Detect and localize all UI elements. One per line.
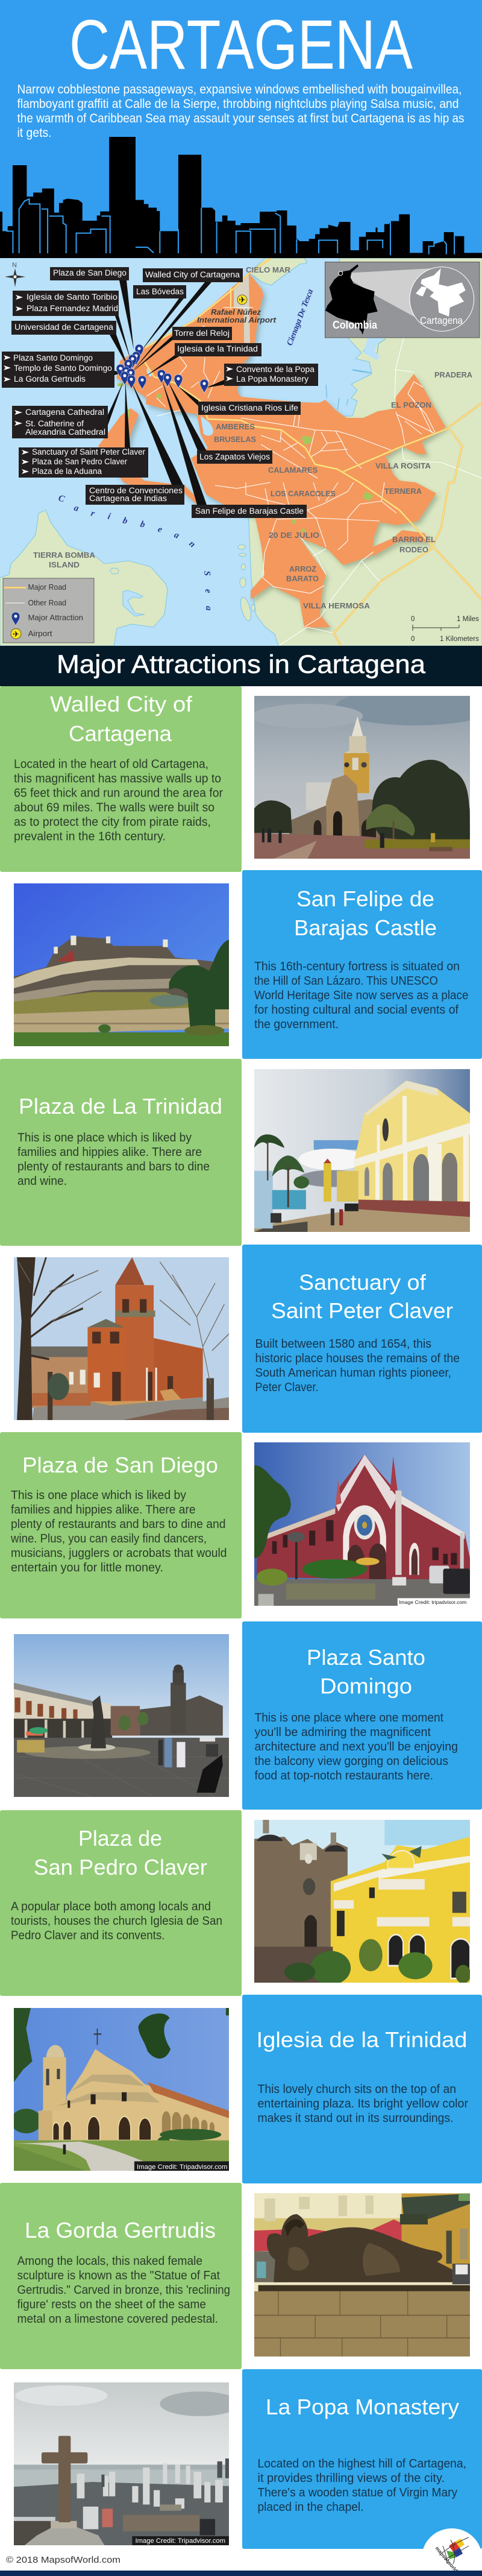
- green parks: [117, 383, 374, 532]
- panel: Plaza de La Trinidad: families and hippies alike. There are: [17, 1146, 202, 1159]
- scale bar: 1 Kilometers: [440, 636, 479, 643]
- area names: RODEO: [399, 546, 428, 554]
- legend: Major Attraction: [28, 613, 83, 622]
- callout text: Iglesia Cristiana Rios Life: [201, 403, 298, 412]
- panel: Plaza de La Trinidad: plenty of restaurants and bars to dine: [17, 1160, 210, 1173]
- panel: Plaza de San Diego: families and hippies alike. There are: [11, 1503, 195, 1517]
- callout text: Convento de la Popa: [236, 365, 315, 374]
- area names: BRUSELAS: [214, 435, 256, 444]
- panel: La Gorda Gertrudis: figure' rests on the sheet of the same: [17, 2298, 206, 2311]
- label: Caribbean Sea: C: [57, 493, 66, 505]
- panel: map of Cartagena: [0, 258, 482, 646]
- panel: San Felipe de Barajas Castle: the government.: [254, 1018, 339, 1031]
- label: Caribbean Sea: i: [107, 511, 112, 522]
- label: Caribbean Sea: n: [187, 539, 197, 549]
- photo: Trinidad church: [254, 1069, 470, 1232]
- panel: La Popa Monastery: There's a wooden statue of Virgin Mary: [258, 2486, 457, 2499]
- callout labels: [2, 267, 318, 518]
- Airport runway: [234, 274, 250, 344]
- area names: AMBERES: [216, 423, 255, 431]
- header panel: [0, 0, 482, 259]
- callout text: [13, 268, 315, 516]
- panel: Iglesia de la Trinidad: Iglesia de la Trinidad: [257, 2027, 468, 2052]
- panel: Plaza Santo Domingo: you'll be admiring the magnificent: [254, 1726, 431, 1739]
- scale bar: 1 Miles: [457, 616, 479, 623]
- callout text: San Felipe de Barajas Castle: [195, 507, 304, 516]
- Cielo Mar land: [249, 258, 307, 285]
- panel: La Gorda Gertrudis: [0, 2183, 242, 2369]
- legend: Airport: [28, 629, 52, 638]
- Tierra Bomba island: [0, 510, 167, 646]
- callout arrows: [4, 295, 233, 474]
- callout text: Las Bóvedas: [136, 287, 184, 296]
- photo: brick church: [14, 1257, 229, 1420]
- panel: Iglesia de la Trinidad: This lovely church sits on the top of an: [258, 2083, 456, 2096]
- callout text: La Popa Monastery: [236, 374, 308, 384]
- panel: Plaza de San Pedro Claver: Pedro Claver and its convents.: [11, 1929, 165, 1942]
- callout text: Walled City of Cartagena: [145, 270, 240, 279]
- panel: Walled City of Cartagena: 65 feet thick and run around the area for: [14, 786, 223, 800]
- intro text: it gets.: [17, 126, 52, 140]
- panel: Plaza Santo Domingo: [242, 1621, 482, 1810]
- scale bar: [411, 616, 479, 643]
- panel: La Gorda Gertrudis: Gertrudis." Carved in bronze, this 'reclining: [17, 2284, 230, 2297]
- panel: Sanctuary of Saint Peter Claver: Sanctuary of: [299, 1270, 427, 1295]
- panel: Plaza de San Diego: [0, 1432, 242, 1618]
- panel: Sanctuary of Saint Peter Claver: historic place houses the remains of the: [255, 1352, 460, 1365]
- panel: Plaza Santo Domingo: food at top-notch restaurants here.: [254, 1769, 433, 1782]
- callout text: Cartagena de Indias: [89, 494, 167, 503]
- panel: Plaza de San Pedro Claver: Plaza de: [78, 1826, 162, 1851]
- label: Caribbean Sea: a: [172, 530, 181, 541]
- area names: CIELO MAR: [246, 266, 290, 274]
- attraction pins: [116, 344, 208, 393]
- area names: BARATO: [286, 575, 319, 583]
- area names: BARRIO EL: [392, 535, 436, 544]
- panel: La Gorda Gertrudis: La Gorda Gertrudis: [25, 2218, 216, 2243]
- airport name: [197, 308, 277, 324]
- area names: ISLAND: [49, 561, 80, 569]
- panel: La Popa Monastery: it provides thrilling views of the city.: [258, 2472, 445, 2485]
- panel: Plaza Santo Domingo: This is one place where one moment: [254, 1711, 443, 1725]
- panel: Sanctuary of Saint Peter Claver: Saint Peter Claver: [271, 1298, 453, 1323]
- label: Caribbean Sea: S: [202, 570, 212, 576]
- callout text: Torre del Reloj: [174, 329, 230, 338]
- small islands: [110, 545, 255, 622]
- label: Caribbean Sea: e: [203, 589, 213, 593]
- panel: San Felipe de Barajas Castle: San Felipe de: [296, 886, 434, 911]
- panel: Plaza de San Pedro Claver: [0, 1810, 242, 1996]
- mainland: [247, 258, 482, 646]
- panel: Plaza de San Diego: entertain you for little money.: [11, 1561, 163, 1574]
- callout text: St. Catherine of: [25, 419, 84, 428]
- panel: Walled City of Cartagena: Located in the heart of old Cartagena,: [14, 757, 208, 771]
- copyright: © 2018 MapsofWorld.com: [6, 2555, 120, 2565]
- panel: Plaza de San Pedro Claver: San Pedro Claver: [34, 1855, 207, 1880]
- scale bar: 0: [411, 616, 415, 623]
- area names: [33, 266, 472, 610]
- callout text: Los Zapatos Viejos: [199, 452, 270, 461]
- area names: LOS CARACOLES: [271, 490, 336, 498]
- label: Caribbean Sea: b: [122, 516, 129, 526]
- callout text: Iglesia de la Trinidad: [177, 344, 258, 353]
- panel: Walled City of Cartagena: about 69 miles. The walls were built so: [14, 801, 214, 814]
- callout text: Plaza de la Aduana: [32, 467, 102, 476]
- panel: Walled City of Cartagena: Walled City of: [50, 692, 193, 716]
- callout text: Plaza Fernandez Madrid: [27, 304, 118, 313]
- area names: 20 DE JULIO: [269, 531, 319, 540]
- inset: Colombia locator: Cartagena: [420, 315, 463, 326]
- callout text: Cartagena Cathedral: [25, 408, 104, 417]
- callout text: Plaza de San Diego: [53, 268, 127, 277]
- photo: bronze sculpture: [254, 2193, 470, 2357]
- panel: San Felipe de Barajas Castle: This 16th-century fortress is situated on: [254, 960, 460, 973]
- panel: San Felipe de Barajas Castle: World Heritage Site now serves as a place: [254, 989, 469, 1002]
- area names: EL POZON: [391, 401, 431, 409]
- panel: Iglesia de la Trinidad: entertaining plaza. Its bright yellow color: [258, 2097, 468, 2110]
- photo: San Pedro Claver: [254, 1820, 470, 1983]
- panel: Plaza de San Diego: plenty of restaurants and bars to dine and: [11, 1518, 225, 1531]
- inset: Colombia locator: [325, 262, 480, 338]
- lagoon: [123, 590, 145, 616]
- callout text: Templo de Santo Domingo: [14, 364, 112, 373]
- label: Caribbean Sea: a: [204, 606, 213, 611]
- callout text: Alexandria Cathedral: [25, 428, 105, 437]
- area names: TERNERA: [384, 487, 422, 496]
- panel: Plaza Santo Domingo: Domingo: [320, 1674, 412, 1698]
- label: Caribbean Sea: e: [157, 525, 164, 535]
- panel: La Gorda Gertrudis: metal on a limestone covered pedestal.: [17, 2312, 218, 2326]
- icon: airport: [237, 295, 247, 305]
- photo: red church: [254, 1442, 470, 1606]
- area names: VILLA HERMOSA: [303, 602, 370, 610]
- logo: [422, 2528, 482, 2576]
- section heading: Major Attractions in Cartagena: [57, 650, 425, 679]
- other roads: [146, 308, 482, 645]
- callout text: La Gorda Gertrudis: [14, 374, 86, 384]
- area names: ARROZ: [289, 565, 316, 573]
- photo: plaza and church: [14, 1634, 229, 1797]
- label: Cienaga De Tesca: Cienaga De Tesca: [286, 288, 315, 347]
- bottom bar: [0, 2571, 482, 2576]
- label: Caribbean Sea: b: [139, 519, 146, 530]
- area names: CALAMARES: [268, 466, 318, 475]
- panel: Walled City of Cartagena: this magnificent has massive walls up to: [14, 772, 221, 785]
- label: Caribbean Sea: [57, 493, 213, 611]
- panel: Sanctuary of Saint Peter Claver: Built between 1580 and 1654, this: [255, 1337, 431, 1351]
- city skyline: [0, 137, 482, 259]
- panel: Sanctuary of Saint Peter Claver: Peter Claver.: [255, 1381, 318, 1394]
- panel: La Popa Monastery: placed in the chapel.: [258, 2501, 364, 2514]
- panel: Walled City of Cartagena: Cartagena: [69, 721, 172, 746]
- panel: Plaza de San Diego: musicians, jugglers or acrobats that would: [11, 1547, 227, 1560]
- label: Caribbean Sea: a: [73, 503, 80, 514]
- inset: Colombia locator: Colombia: [333, 319, 378, 331]
- inner lagoon: [147, 367, 213, 435]
- callout text: Plaza Santo Domingo: [13, 353, 93, 362]
- icon: airport: ✈: [239, 295, 246, 305]
- panel: Plaza de San Diego: This is one place which is liked by: [11, 1489, 186, 1502]
- panel: Plaza Santo Domingo: the balcony view gorging on delicious: [254, 1755, 448, 1768]
- panel: Plaza de San Pedro Claver: A popular place both among locals and: [11, 1900, 211, 1913]
- area names: PRADERA: [434, 371, 472, 379]
- area names: TIERRA BOMBA: [33, 551, 95, 560]
- panel: San Felipe de Barajas Castle: for hosting cultural and social events of: [254, 1003, 459, 1017]
- area names: VILLA ROSITA: [375, 462, 431, 470]
- panel: Plaza de San Diego: wine. Plus, you can easily find dancers,: [10, 1532, 207, 1545]
- panel: San Felipe de Barajas Castle: the Hill of San Lázaro. This UNESCO: [254, 974, 438, 988]
- photo: cross over city: [14, 2382, 229, 2545]
- compass: N: [12, 262, 17, 269]
- scale bar: 0: [411, 636, 415, 643]
- panel: Walled City of Cartagena: [0, 686, 242, 872]
- image credit: Image Credit: tripadvisor.com: [399, 1599, 466, 1605]
- panel: Iglesia de la Trinidad: makes it stand out in its surroundings.: [258, 2112, 453, 2125]
- photo: clock tower gate: [254, 696, 470, 859]
- compass: [5, 262, 25, 287]
- panel: San Felipe de Barajas Castle: [242, 870, 482, 1059]
- label: Caribbean Sea: r: [90, 508, 96, 519]
- callout text: Plaza de San Pedro Claver: [32, 457, 127, 466]
- panel: Plaza Santo Domingo: Plaza Santo: [307, 1645, 425, 1670]
- panel: Sanctuary of Saint Peter Claver: South American human rights pioneer,: [255, 1366, 451, 1380]
- legend: Major Road: [28, 582, 66, 592]
- callout text: Sanctuary of Saint Peter Claver: [32, 447, 146, 456]
- section heading: [0, 646, 482, 686]
- panel: Iglesia de la Trinidad: [242, 1995, 482, 2183]
- callout text: Iglesia de Santo Toribio: [27, 292, 117, 301]
- legend: ✈: [13, 630, 19, 639]
- legend: [3, 578, 94, 643]
- panel: Plaza Santo Domingo: architecture and next you'll be enjoying: [254, 1740, 458, 1754]
- panel: Plaza de San Pedro Claver: tourists, houses the church Iglesia de San: [11, 1915, 222, 1928]
- airport name: Rafael Núñez: [211, 308, 261, 317]
- panel: La Popa Monastery: La Popa Monastery: [266, 2394, 459, 2419]
- panel: La Popa Monastery: [242, 2369, 482, 2549]
- panel: Sanctuary of Saint Peter Claver: [242, 1245, 482, 1433]
- panel: Plaza de San Diego: Plaza de San Diego: [22, 1453, 218, 1477]
- airport name: International Airport: [197, 315, 277, 324]
- panel: La Gorda Gertrudis: Among the locals, this naked female: [17, 2255, 202, 2268]
- panel: Plaza de La Trinidad: This is one place which is liked by: [17, 1131, 192, 1144]
- image credit: Image Credit: Tripadvisor.com: [137, 2164, 228, 2171]
- intro text: [17, 83, 464, 140]
- Cienaga inlets: [326, 339, 386, 410]
- panel: Plaza de La Trinidad: and wine.: [17, 1175, 67, 1188]
- panel: Plaza de La Trinidad: Plaza de La Trinidad: [19, 1094, 222, 1119]
- leader lines: [107, 280, 224, 505]
- photo: castle: [14, 883, 229, 1046]
- panel: San Felipe de Barajas Castle: Barajas Castle: [294, 915, 437, 940]
- city area: [98, 273, 446, 628]
- image credit: Image Credit: Tripadvisor.com: [135, 2537, 225, 2545]
- panel: Walled City of Cartagena: as to protect the city from pirate raids,: [14, 815, 211, 829]
- panel: Walled City of Cartagena: prevalent in the 16th century.: [14, 830, 166, 843]
- callout text: Universidad de Cartagena: [14, 323, 113, 332]
- panel: La Gorda Gertrudis: sculpture is known as the "Statue of Fat: [17, 2269, 220, 2282]
- panel: La Popa Monastery: Located on the highest hill of Cartagena,: [258, 2457, 466, 2470]
- major roads: [145, 258, 482, 646]
- photo: yellow church: [14, 2008, 229, 2171]
- panel: Plaza de La Trinidad: [0, 1059, 242, 1246]
- legend: Other Road: [28, 598, 66, 607]
- callout text: Centro de Convenciones: [89, 486, 183, 495]
- water: [0, 258, 482, 646]
